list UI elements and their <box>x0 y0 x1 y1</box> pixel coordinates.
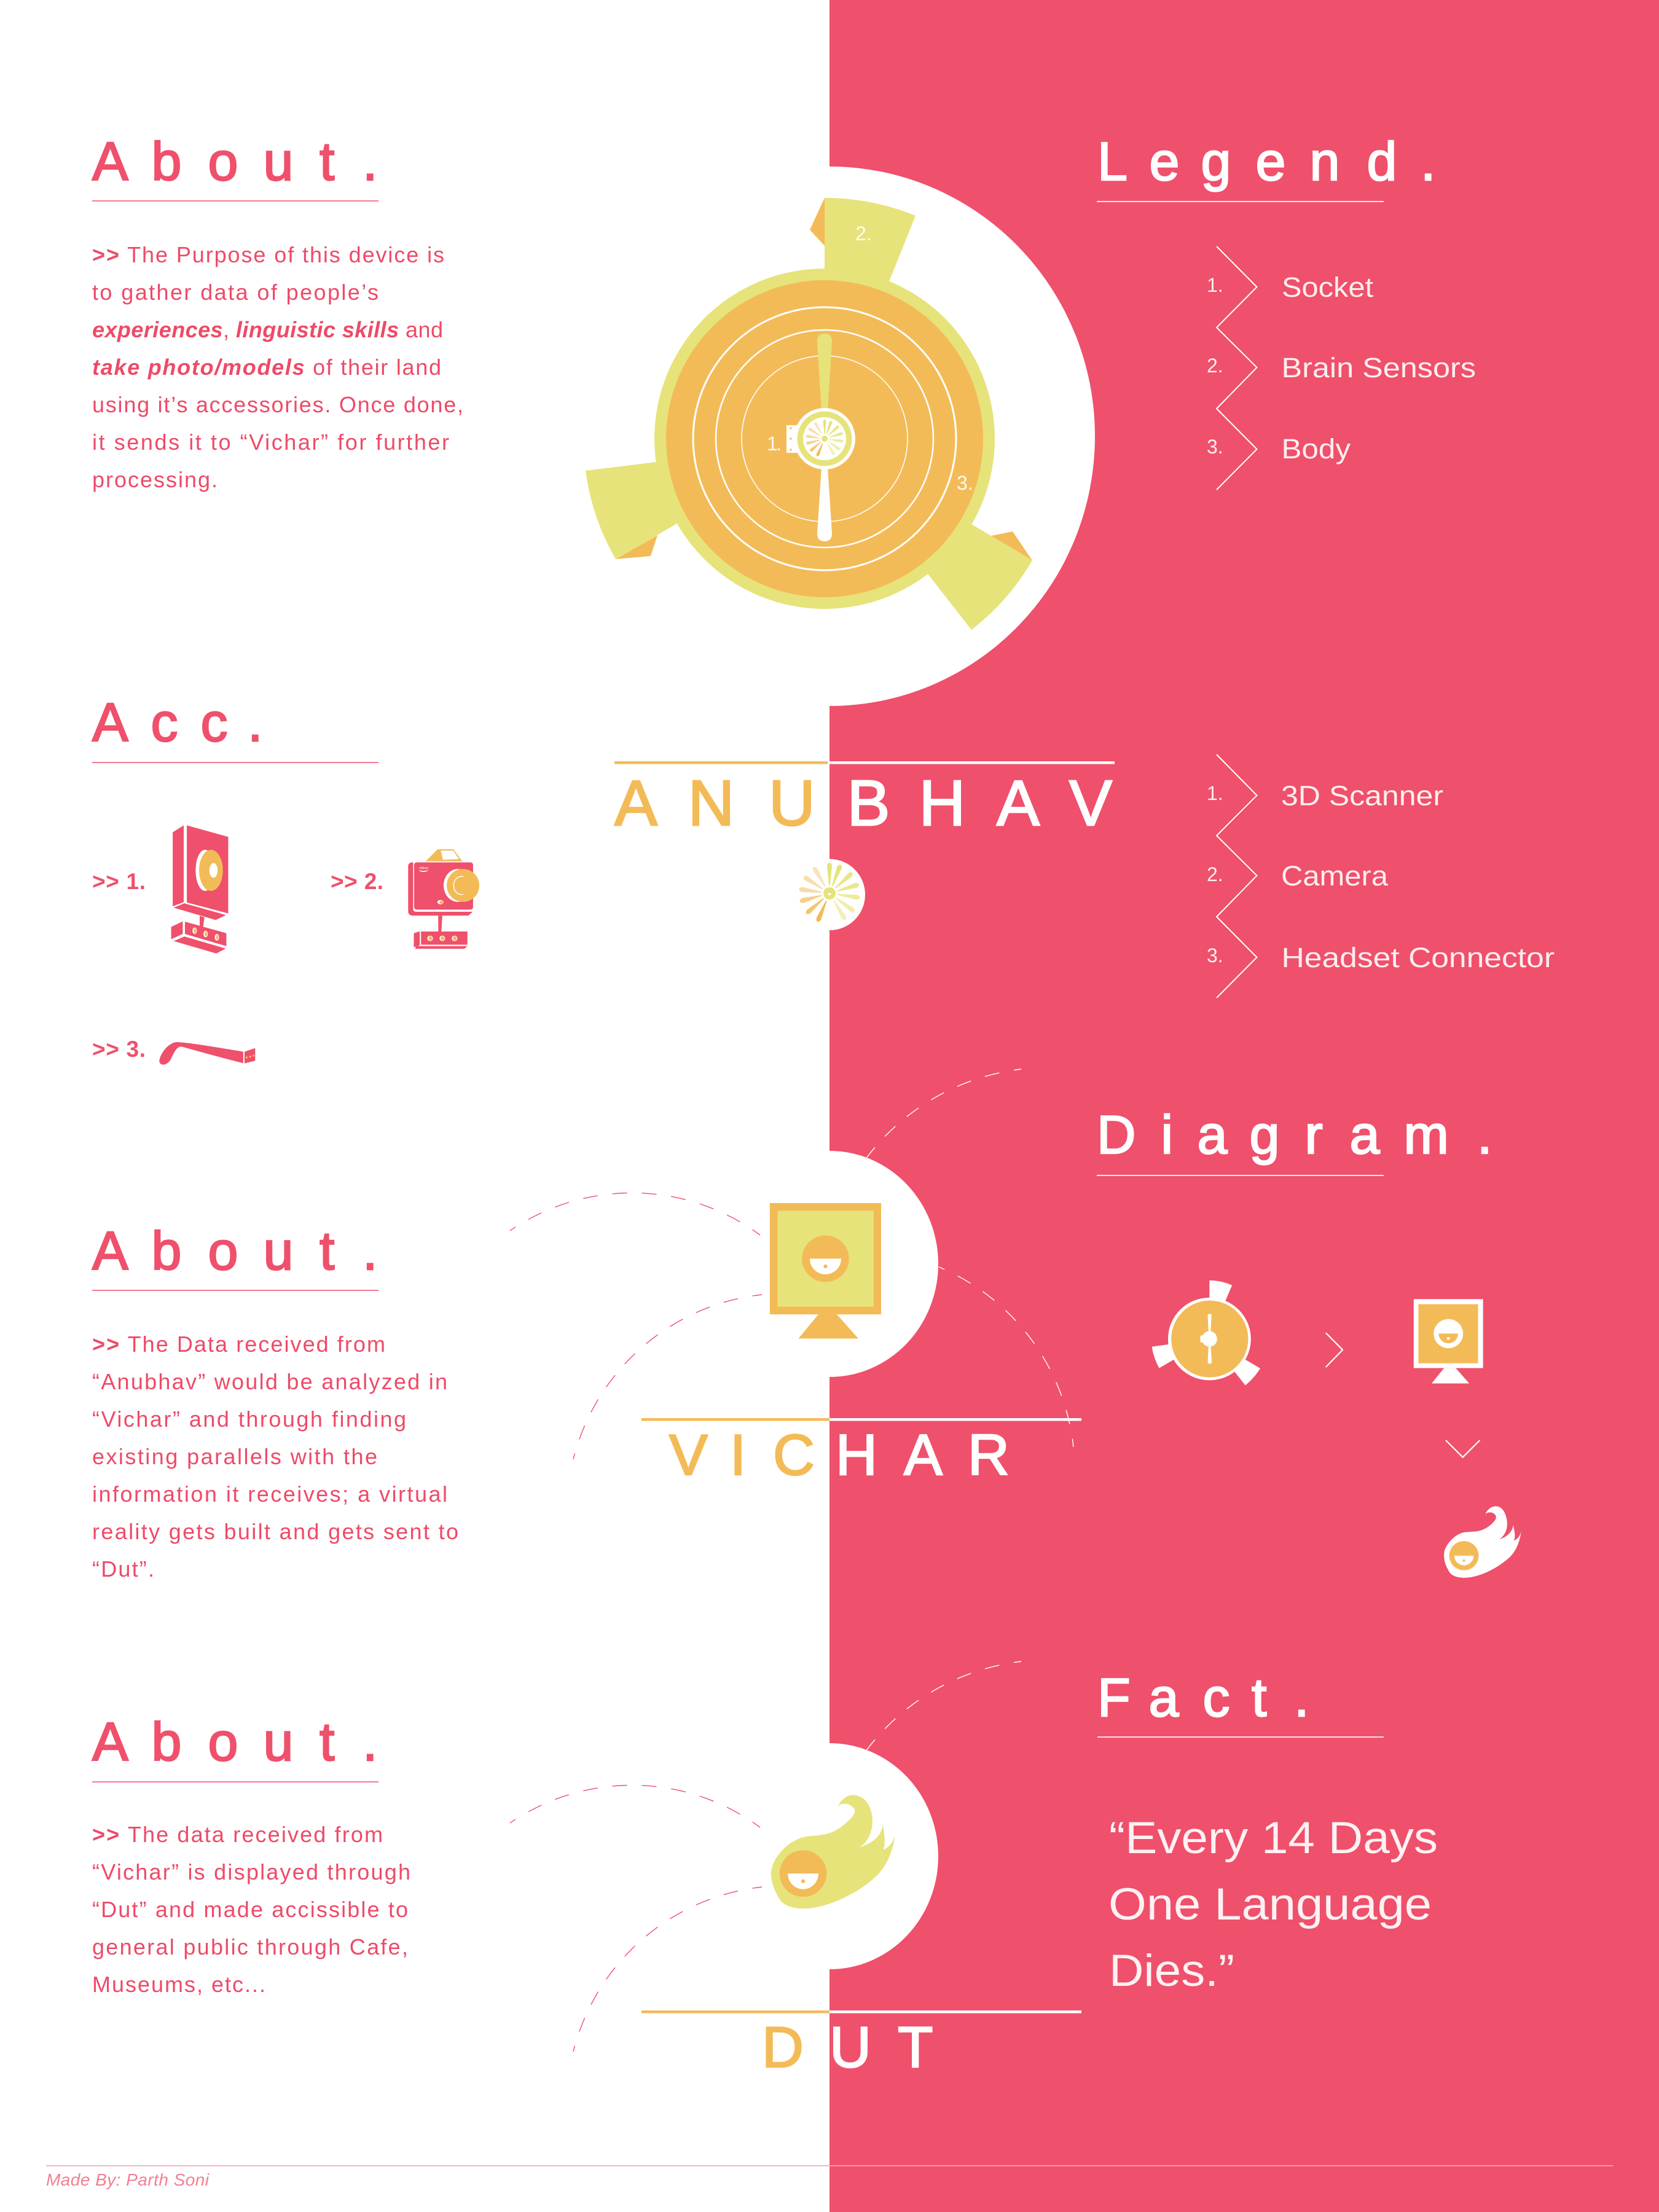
list: 1. <box>1207 782 1223 804</box>
callout numbers: 1. <box>767 433 782 455</box>
panel: about Dut <box>92 1711 410 1997</box>
white half circle behind Vichar <box>721 1151 938 1377</box>
quote <box>1108 1813 1438 1996</box>
text block: about Dut: general public through Cafe, <box>92 1934 408 1959</box>
icon: camera: nikon <box>419 866 428 870</box>
list: Socket <box>1282 272 1374 303</box>
device: Anubhav headset diagram <box>586 198 1032 630</box>
heading: Legend: Legend. <box>1097 131 1435 192</box>
text block: about Vichar: information it receives; a virtual <box>92 1481 447 1507</box>
text block: about Vichar: “Dut”. <box>92 1556 154 1582</box>
text block: about Vichar <box>92 1332 458 1582</box>
quote: Dies.” <box>1109 1946 1234 1996</box>
title: Dut: D UT <box>762 2015 933 2079</box>
list: Camera <box>1281 860 1389 892</box>
icon: sunburst half circle <box>794 859 865 930</box>
heading: About: About. <box>92 1711 377 1772</box>
icon: headset connector <box>159 1042 255 1065</box>
title: Vichar: VIC HAR <box>669 1422 1010 1487</box>
icon: 3D scanner <box>171 825 228 954</box>
white half circle behind Dut <box>721 1743 938 1969</box>
panel: about Vichar <box>92 1220 458 1582</box>
text block: about Vichar: “Anubhav” would be analyzed in <box>92 1369 447 1394</box>
footer: Made By: Parth Soni <box>46 2170 210 2189</box>
socket bracket <box>786 425 802 453</box>
text block: about Dut: “Dut” and made accissible to <box>92 1897 408 1922</box>
arrow: right <box>1326 1333 1343 1367</box>
callout numbers: 2. <box>855 222 872 245</box>
list <box>1207 780 1555 973</box>
heading: Diagram: Diagram. <box>1097 1104 1492 1165</box>
list: 2. <box>1207 863 1223 885</box>
inner disc <box>666 280 983 597</box>
dashed arcs: Vichar <box>510 1069 1073 1459</box>
heading: Acc: Acc. <box>92 692 262 753</box>
list: 3. <box>1207 944 1223 967</box>
list <box>1207 272 1476 465</box>
heading: Fact: Fact. <box>1097 1667 1309 1728</box>
text block: about Vichar: >> The Data received from <box>92 1332 385 1357</box>
panel: fact <box>1097 1667 1438 1996</box>
list: 3D Scanner <box>1281 780 1443 811</box>
zigzag divider <box>1217 755 1257 998</box>
list: 3. <box>1207 436 1223 458</box>
label 3: >> 3. <box>92 1037 146 1062</box>
hub <box>794 408 855 469</box>
list: Brain Sensors <box>1282 352 1476 383</box>
list: 1. <box>1207 274 1223 296</box>
needle: top <box>817 334 832 412</box>
panel: diagram <box>1097 1104 1521 1578</box>
text block: about Vichar: “Vichar” and through finding <box>92 1406 406 1432</box>
blade fold accents <box>616 198 1032 560</box>
label 1: >> 1. <box>92 869 146 894</box>
background: pink right half <box>830 0 1659 2212</box>
text block: about Vichar: reality gets built and gets sent to <box>92 1519 458 1544</box>
icon: Vichar monitor <box>770 1203 881 1338</box>
outer disc <box>654 269 995 609</box>
text block: about Dut <box>92 1822 410 1997</box>
list: Headset Connector <box>1282 942 1555 973</box>
text block: about Anubhav: take photo/models of their land <box>92 355 441 380</box>
icon: monitor <box>1414 1299 1483 1383</box>
text block: about Anubhav: processing. <box>92 467 218 492</box>
text block: about Anubhav: using it’s accessories. Once done, <box>92 392 463 417</box>
panel: legend <box>1097 131 1476 490</box>
blades <box>586 198 1032 630</box>
white half circle behind Anubhav device <box>564 167 1095 706</box>
icon: camera <box>408 849 479 949</box>
quote: One Language <box>1108 1880 1432 1929</box>
panel: accessories <box>92 692 479 1065</box>
arrow: down <box>1446 1440 1480 1457</box>
label 2: >> 2. <box>331 869 383 894</box>
dashed arcs: Dut <box>510 1661 1021 2052</box>
callout numbers: 3. <box>957 472 973 494</box>
text block: about Anubhav: experiences, linguistic skills and <box>92 317 443 342</box>
list: Body <box>1282 433 1351 465</box>
icon: flame <box>1444 1506 1521 1578</box>
panel: about Anubhav <box>92 131 463 492</box>
text block: about Vichar: existing parallels with the <box>92 1444 377 1469</box>
icon: Dut flame <box>771 1795 895 1908</box>
title: Dut <box>641 2010 1081 2079</box>
text block: about Dut: Museums, etc... <box>92 1972 265 1997</box>
title: Anubhav: ANU BHAV <box>614 767 1112 839</box>
panel: right list accessories <box>1207 755 1555 998</box>
list: 2. <box>1207 355 1223 377</box>
text block: about Anubhav <box>92 242 463 492</box>
callout numbers <box>767 222 973 494</box>
diagram icons <box>1152 1281 1521 1578</box>
rings <box>693 307 956 570</box>
text block: about Dut: “Vichar” is displayed through <box>92 1859 410 1885</box>
text block: about Anubhav: it sends it to “Vichar” for further <box>92 429 449 455</box>
heading: About: About. <box>92 131 377 192</box>
heading: About: About. <box>92 1220 377 1281</box>
text block: about Anubhav: >> The Purpose of this device is <box>92 242 444 267</box>
needle: bottom <box>817 467 832 541</box>
text block: about Dut: >> The data received from <box>92 1822 383 1847</box>
zigzag divider <box>1217 246 1257 490</box>
quote: “Every 14 Days <box>1109 1813 1438 1863</box>
icon: device <box>1152 1281 1260 1386</box>
text block: about Anubhav: to gather data of people’s <box>92 280 378 305</box>
